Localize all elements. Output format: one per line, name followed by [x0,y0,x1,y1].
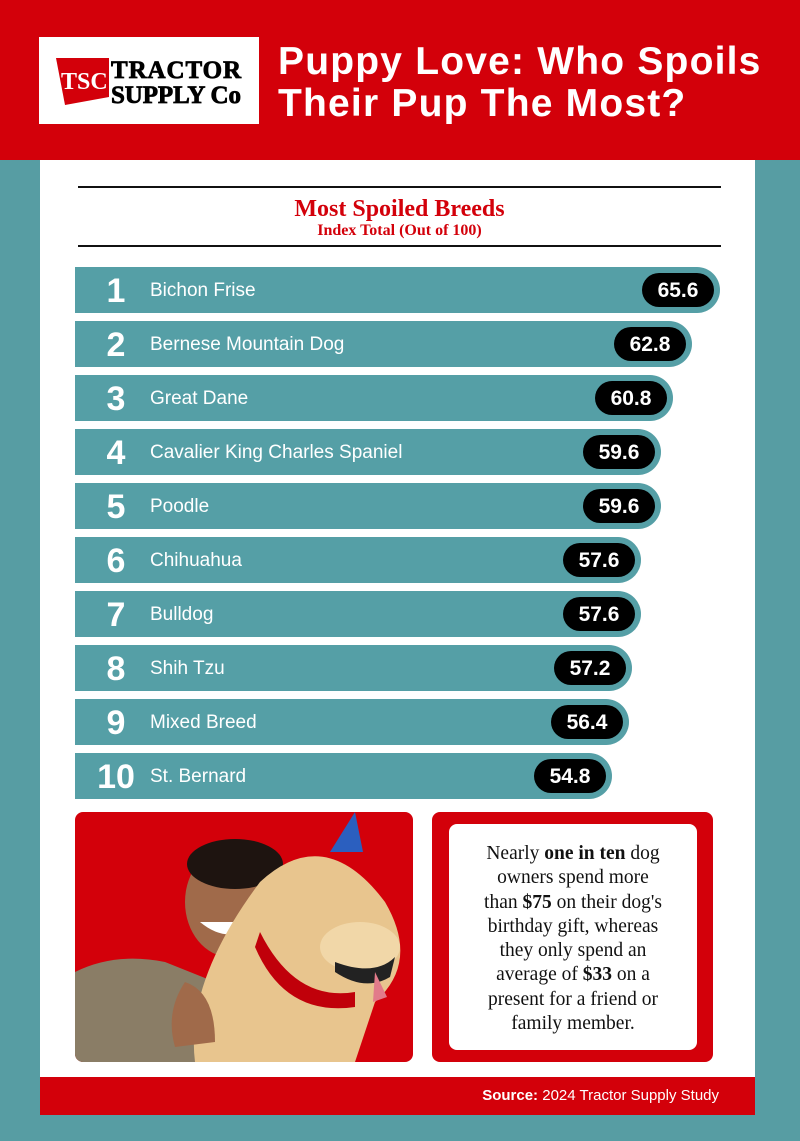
chart heading: Most Spoiled Breeds [294,196,505,222]
footer source [40,1077,755,1115]
bar chart: 6 [107,542,125,580]
bar chart: 1 [107,272,125,310]
callout [432,812,713,1062]
logo [39,37,259,124]
bar chart: 59.6 [599,495,639,518]
bar chart: Bichon Frise [150,280,256,301]
bar chart: Mixed Breed [150,712,257,733]
bar chart: 57.6 [579,549,619,572]
footer source: Source: 2024 Tractor Supply Study [482,1087,719,1104]
bar chart [75,267,720,799]
bar chart: Poodle [150,496,209,517]
chart heading [78,186,721,247]
bar chart: 56.4 [567,711,607,734]
bar chart: Bulldog [150,604,213,625]
logo: SUPPLY Co [111,82,241,109]
bar chart: 10 [97,758,135,796]
bar chart: 4 [107,434,125,472]
bar chart: Shih Tzu [150,658,225,679]
bar chart: Great Dane [150,388,248,409]
bar chart: 65.6 [658,279,698,302]
bar chart: Cavalier King Charles Spaniel [150,442,402,463]
bar chart: 9 [107,704,125,742]
photo: boy with dog in party hat [75,812,413,1062]
bar chart: 8 [107,650,125,688]
bar chart: 2 [107,326,125,364]
header band [0,0,800,160]
bar chart: 54.8 [550,765,590,788]
callout: Nearly one in ten dog [486,843,660,864]
callout: they only spend an [500,940,646,961]
bar chart: 62.8 [630,333,670,356]
callout: owners spend more [497,867,649,888]
callout: than $75 on their dog's [484,892,662,913]
callout: average of $33 on a [496,964,650,985]
bar chart: St. Bernard [150,766,246,787]
bar chart: 7 [107,596,125,634]
callout: family member. [511,1013,635,1034]
callout: present for a friend or [488,989,658,1010]
bar chart: 3 [107,380,125,418]
bar chart: Chihuahua [150,550,242,571]
callout: birthday gift, whereas [488,916,658,937]
logo: TSC [61,69,108,95]
bar chart: 57.6 [579,603,619,626]
white panel [40,160,755,1115]
bar chart: 59.6 [599,441,639,464]
bar chart: Bernese Mountain Dog [150,334,344,355]
logo: TRACTOR [111,57,242,84]
bar chart: 60.8 [611,387,651,410]
title: Puppy Love: Who Spoils Their Pup The Most? [278,40,762,125]
bar chart: 5 [107,488,125,526]
chart heading: Index Total (Out of 100) [317,222,482,239]
bar chart: 57.2 [570,657,610,680]
